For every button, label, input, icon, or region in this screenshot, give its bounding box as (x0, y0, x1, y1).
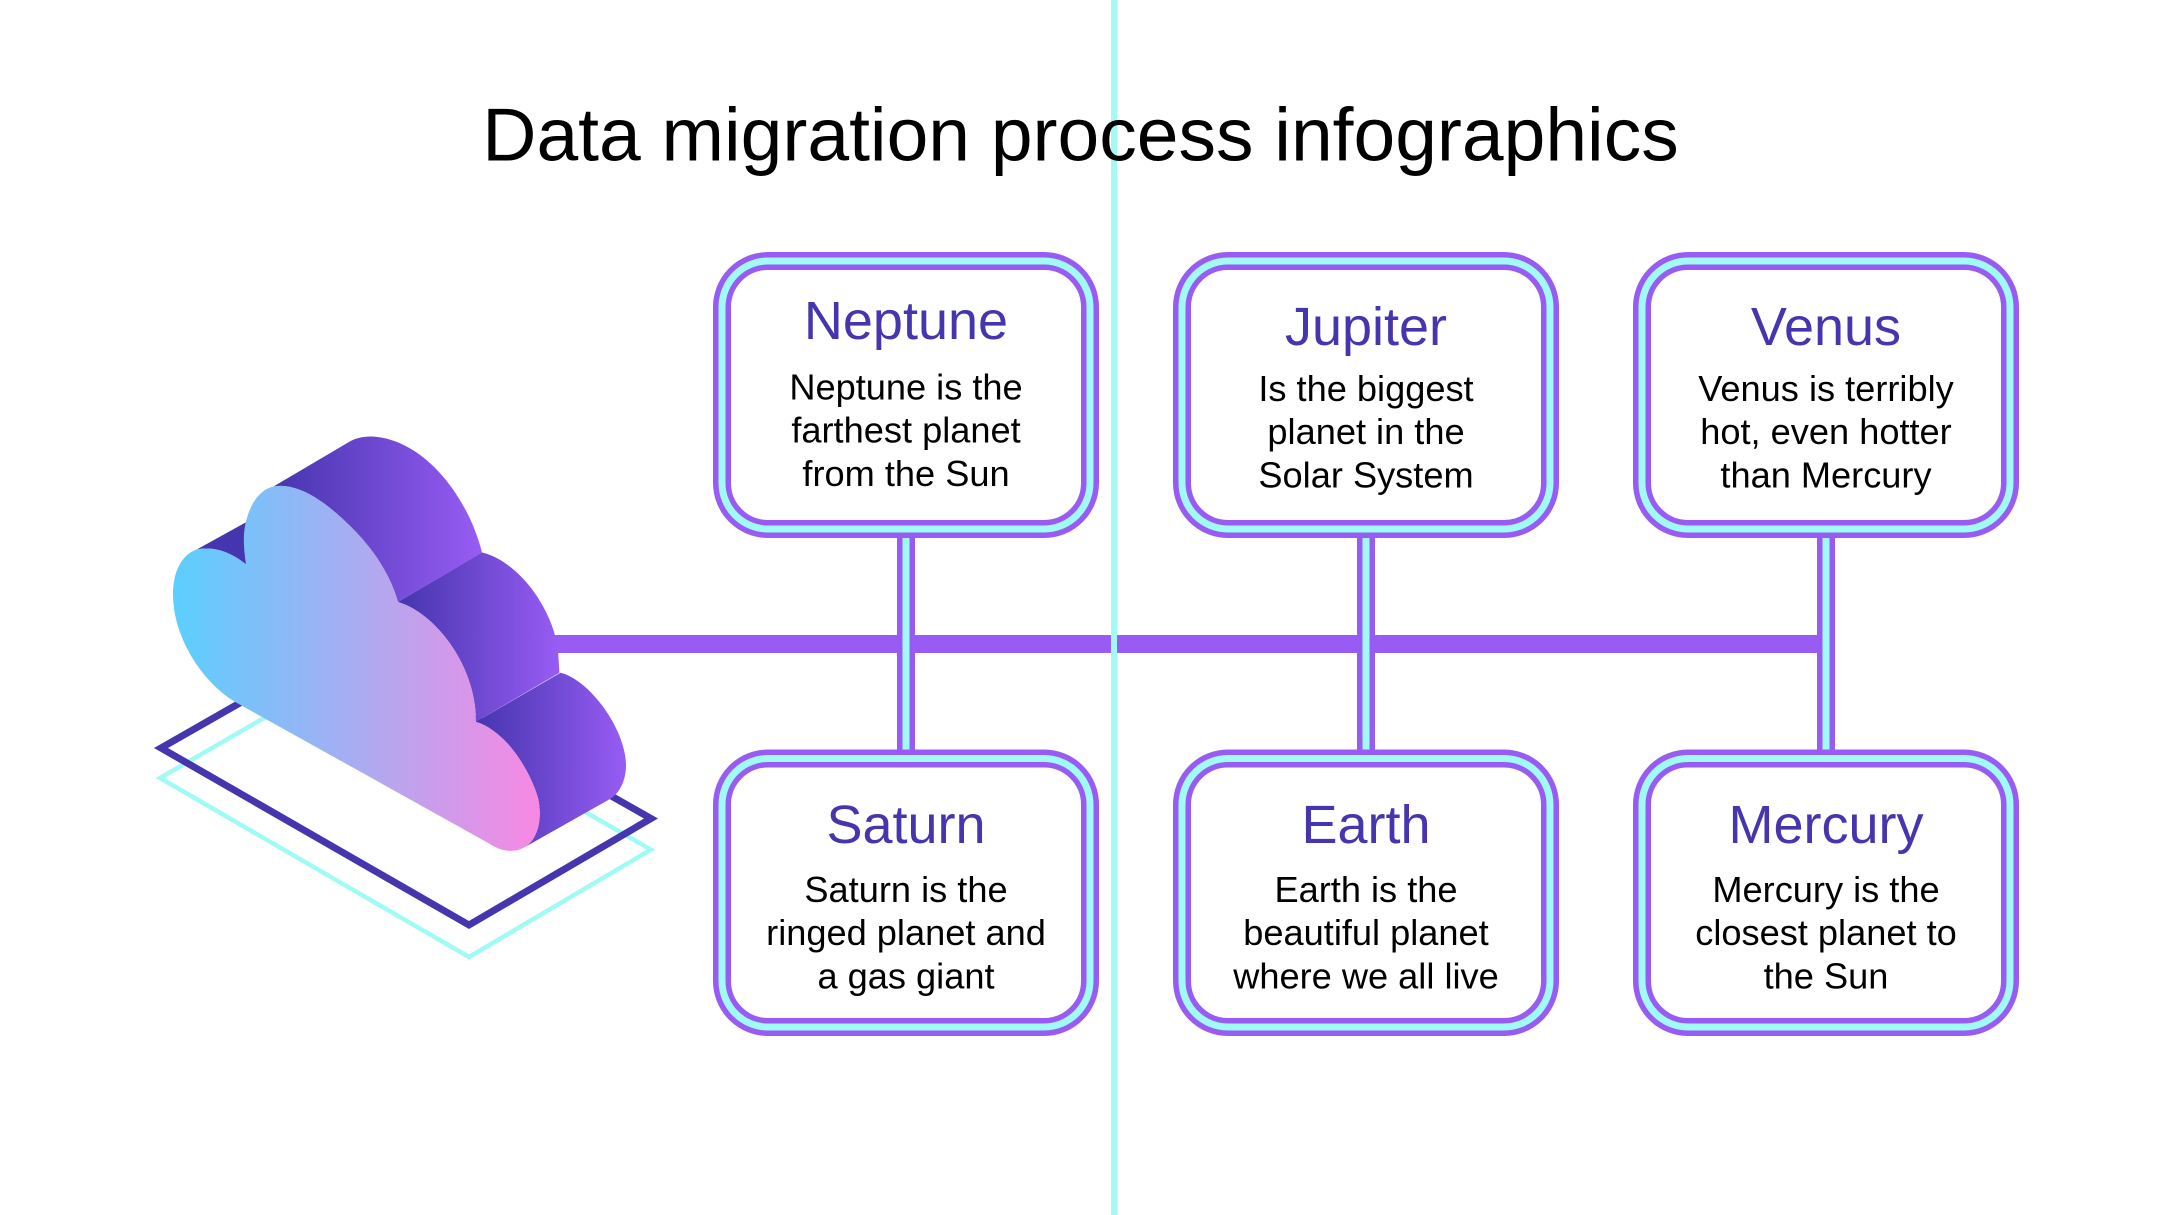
horizontal timeline bar (550, 635, 1826, 653)
cloud: front face (173, 486, 540, 851)
cloud: left side face (197, 522, 246, 564)
heading: Earth: Earth (1301, 795, 1431, 855)
heading: Venus: Venus (1751, 297, 1901, 357)
text: Venus description: hot, even hotter (1700, 411, 1952, 452)
icon: isometric cloud on platform (160, 436, 651, 957)
text: Mercury description: Mercury is the (1712, 869, 1940, 910)
text: Mercury description: the Sun (1764, 955, 1888, 996)
text: Earth description: where we all live (1232, 955, 1499, 996)
panel: Jupiter (1182, 261, 1550, 529)
text: Venus description: than Mercury (1720, 454, 1932, 495)
heading: Saturn: Saturn (826, 795, 986, 855)
text: Jupiter description: planet in the (1267, 411, 1465, 452)
text: Jupiter description: Solar System (1258, 454, 1474, 495)
text: Saturn description: ringed planet and (766, 912, 1046, 953)
cloud: middle side face (398, 552, 559, 722)
panel: Venus (1642, 261, 2010, 529)
connector: Jupiter to Earth (1357, 529, 1375, 759)
title: Data migration process infographics (482, 92, 1679, 176)
text: Jupiter description: Is the biggest (1258, 368, 1474, 409)
panel: Earth (1182, 758, 1550, 1027)
text: Saturn description: a gas giant (817, 955, 995, 996)
text: Neptune description: Neptune is the (789, 366, 1023, 408)
text: Mercury description: closest planet to (1695, 912, 1957, 953)
cloud: lower side face (476, 673, 626, 847)
heading: Neptune: Neptune (804, 291, 1008, 351)
text: Saturn description: Saturn is the (804, 869, 1008, 910)
text: Venus description: Venus is terribly (1698, 368, 1955, 409)
text: Neptune description: from the Sun (802, 453, 1010, 494)
panel: Saturn (722, 758, 1090, 1027)
text: Neptune description: farthest planet (791, 410, 1021, 451)
connector: Neptune to Saturn (897, 529, 915, 759)
panel: Mercury (1642, 758, 2010, 1027)
platform: indigo outline (161, 644, 651, 925)
cloud: top side face (274, 436, 482, 602)
text: Earth description: Earth is the (1274, 869, 1458, 910)
vertical guide line (1111, 0, 1117, 1215)
connector: Venus to Mercury (1817, 529, 1835, 759)
panel: Neptune (722, 261, 1090, 529)
platform: cyan outline (160, 673, 651, 957)
heading: Jupiter: Jupiter (1285, 297, 1447, 357)
heading: Mercury: Mercury (1728, 795, 1924, 855)
text: Earth description: beautiful planet (1243, 912, 1489, 953)
